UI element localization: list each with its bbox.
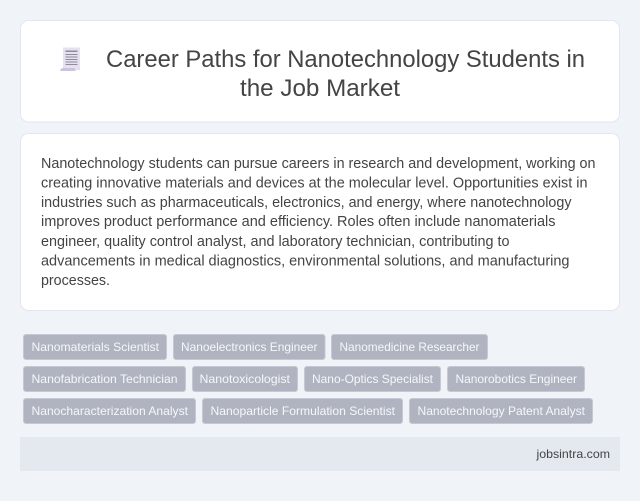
tag: Nanocharacterization Analyst (24, 398, 196, 424)
text block: description (41, 156, 596, 289)
footer (20, 437, 620, 471)
icon: document scroll (60, 48, 80, 71)
tag: Nanofabrication Technician: Nanofabrication Technician (32, 372, 178, 386)
title: the Job Market (240, 75, 400, 102)
tag: Nanoparticle Formulation Scientist: Nanoparticle Formulation Scientist (210, 404, 396, 418)
text block: description: improves product performance and efficiency. Roles often include nanomaterials (41, 214, 556, 230)
text block: description: creating innovative materials and devices at the molecular level. Opportunities exist in (41, 176, 588, 192)
tag: Nanotoxicologist (192, 366, 298, 392)
text block: description: processes. (41, 273, 110, 289)
text block: description: industries such as pharmaceuticals, electronics, and energy, where nanotechnology (41, 195, 572, 211)
tag: Nanomaterials Scientist (24, 334, 166, 360)
tag: Nanoparticle Formulation Scientist (202, 398, 402, 424)
title (106, 46, 585, 102)
tag: Nanomedicine Researcher (332, 334, 488, 360)
tag: Nanofabrication Technician (24, 366, 186, 392)
panel: header (20, 20, 620, 122)
tag: Nanoelectronics Engineer (174, 334, 325, 360)
tag: Nanotechnology Patent Analyst: Nanotechnology Patent Analyst (418, 404, 586, 418)
tag: Nanocharacterization Analyst: Nanocharacterization Analyst (32, 404, 189, 418)
panel: description (20, 134, 620, 310)
tag: Nanotoxicologist: Nanotoxicologist (200, 372, 291, 386)
tag: Nanotechnology Patent Analyst (410, 398, 592, 424)
tag: Nanomaterials Scientist: Nanomaterials Scientist (32, 340, 160, 354)
tag: Nano-Optics Specialist (304, 366, 440, 392)
text block: description: engineer, quality control analyst, and laboratory technician, contributing to (41, 234, 510, 250)
tag: Nanorobotics Engineer: Nanorobotics Engineer (456, 372, 577, 386)
tag: Nanomedicine Researcher: Nanomedicine Researcher (340, 340, 480, 354)
text block: description: Nanotechnology students can pursue careers in research and development, working on (41, 156, 596, 172)
tag list (24, 334, 592, 424)
text block: description: advancements in medical diagnostics, environmental solutions, and manufacturing (41, 254, 570, 270)
tag: Nano-Optics Specialist: Nano-Optics Specialist (312, 372, 434, 386)
title: Career Paths for Nanotechnology Students in (106, 46, 585, 73)
footer: jobsintra.com (535, 447, 610, 461)
tag: Nanoelectronics Engineer: Nanoelectronics Engineer (181, 340, 318, 354)
tag: Nanorobotics Engineer (448, 366, 584, 392)
